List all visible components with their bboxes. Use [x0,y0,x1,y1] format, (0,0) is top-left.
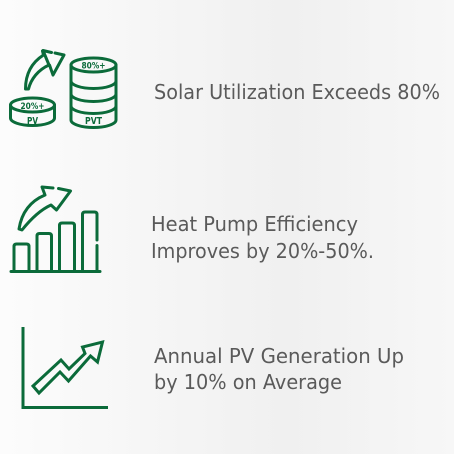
bar 1 [14,244,29,271]
icon: PV and PVT cylinders with arrow [10,50,116,128]
icon: curved up arrow [26,50,64,89]
heading: heat pump efficiency: Heat Pump Efficiency [151,212,358,236]
heading: solar utilization: Solar Utilization Exceeds 80% [154,80,440,104]
icon: small PV cylinder [10,98,54,127]
icon: tall PVT cylinder: PVT [85,116,102,127]
icon: curved arrow [19,187,70,230]
bar 2 [37,234,52,271]
icon: small PV cylinder: PV [27,116,38,127]
bar 3 [60,223,74,271]
chart axes [23,327,108,408]
chart baseline [11,270,100,273]
icon: tall PVT cylinder: 80%+ [82,62,106,72]
heading: annual PV generation: Annual PV Generation Up [154,344,404,368]
icon: tall PVT cylinder [71,58,116,128]
icon: line chart with arrow [23,327,108,408]
heading: heat pump efficiency: Improves by 20%-50%. [151,239,374,263]
heading: heat pump efficiency [151,212,374,263]
icon: small PV cylinder: 20%+ [20,102,44,112]
heading: annual PV generation: by 10% on Average [154,370,342,394]
icon: bar chart with arrow [11,187,100,272]
zigzag arrow [33,342,102,393]
bar 4 [82,212,97,271]
heading: annual PV generation [154,344,404,394]
